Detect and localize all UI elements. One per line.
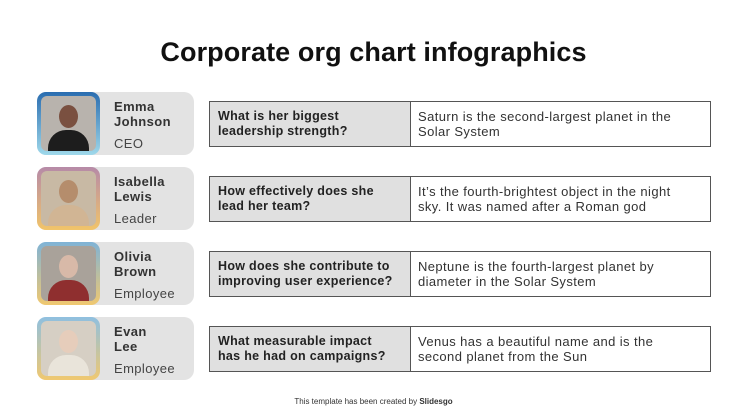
- table row 2: lead her team?: [218, 199, 310, 213]
- card: Olivia Brown: [37, 242, 194, 305]
- table row 2: It’s the fourth-brightest object in the night: [418, 184, 671, 199]
- name: Isabella: Isabella: [114, 174, 165, 189]
- table row 2: [209, 176, 711, 222]
- table row 3: improving user experience?: [218, 274, 393, 288]
- name: Isabella: [114, 174, 165, 204]
- name: Evan: Evan: [114, 324, 147, 339]
- name: Evan: [114, 324, 147, 354]
- table row 3: diameter in the Solar System: [418, 274, 596, 289]
- card: Evan Lee: [37, 317, 194, 380]
- footer: This template has been created by Slidesgo: [294, 397, 453, 406]
- table row 4: has he had on campaigns?: [218, 349, 386, 363]
- table row 4: Venus has a beautiful name and is the: [418, 334, 653, 349]
- table row 2: sky. It was named after a Roman god: [418, 199, 646, 214]
- table row 4: What measurable impact: [218, 334, 372, 348]
- table row 1: What is her biggest: [218, 109, 339, 123]
- role: Leader: Leader: [114, 211, 157, 226]
- icon: photo Isabella: [37, 167, 100, 230]
- name: Emma: [114, 99, 171, 129]
- table row 4: second planet from the Sun: [418, 349, 587, 364]
- title: Corporate org chart infographics: [160, 37, 587, 67]
- card: Emma Johnson: [37, 92, 194, 155]
- icon: photo Evan: [37, 317, 100, 380]
- role: CEO: CEO: [114, 136, 143, 151]
- name: Emma: Johnson: [114, 114, 171, 129]
- name: Olivia: Brown: [114, 264, 156, 279]
- table row 3: Neptune is the fourth-largest planet by: [418, 259, 654, 274]
- icon: photo Olivia: [37, 242, 100, 305]
- table row 1: Saturn is the second-largest planet in the: [418, 109, 671, 124]
- role: Employee: Employee: [114, 361, 175, 376]
- icon: photo Emma: [37, 92, 100, 155]
- name: Evan: Lee: [114, 339, 138, 354]
- table row 1: [209, 101, 711, 147]
- name: Emma: Emma: [114, 99, 155, 114]
- table row 4: [209, 326, 711, 372]
- name: Isabella: Lewis: [114, 189, 152, 204]
- table row 3: [209, 251, 711, 297]
- table row 1: leadership strength?: [218, 124, 348, 138]
- table row 1: Solar System: [418, 124, 500, 139]
- table row 3: How does she contribute to: [218, 259, 390, 273]
- name: Olivia: [114, 249, 156, 279]
- name: Olivia: Olivia: [114, 249, 152, 264]
- table row 2: How effectively does she: [218, 184, 374, 198]
- card: Isabella Lewis: [37, 167, 194, 230]
- role: Employee: Employee: [114, 286, 175, 301]
